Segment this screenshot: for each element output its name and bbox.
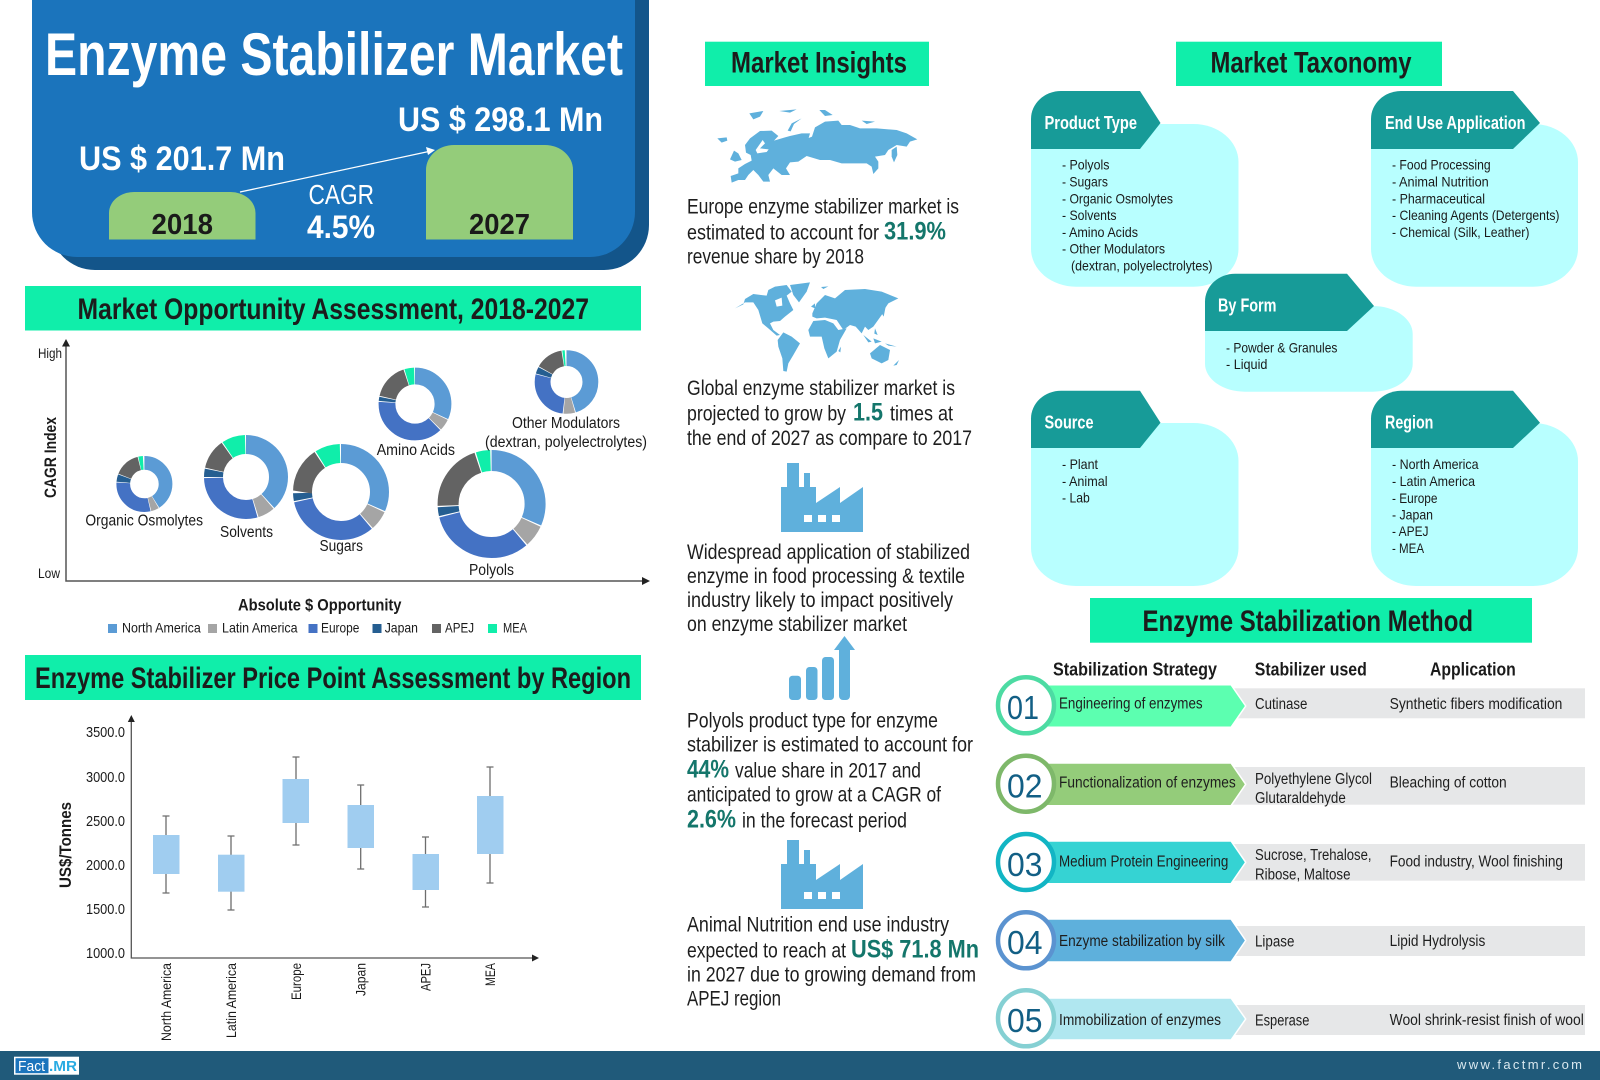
heading: price point — [25, 655, 641, 700]
text: europe insight: Europe enzyme stabilizer market is — [687, 196, 959, 218]
y axis title: US$/Tonnes — [57, 802, 75, 888]
growth arrow — [240, 147, 435, 192]
logo: Fact — [18, 1058, 46, 1075]
legend: Latin America — [222, 620, 298, 636]
bar 2027 — [426, 145, 573, 241]
card: region — [1371, 391, 1578, 586]
card: end use application: End Use Application — [1385, 113, 1526, 133]
x tick labels: MEA — [482, 963, 498, 986]
box: europe — [282, 757, 309, 845]
row 03: Ribose, Maltose — [1255, 866, 1350, 883]
row 02: Bleaching of cotton — [1390, 775, 1507, 792]
card: region: - MEA — [1392, 540, 1425, 556]
card: end use application: - Cleaning Agents (Detergents) — [1392, 207, 1560, 223]
icon: factory — [781, 463, 863, 532]
legend — [108, 620, 528, 636]
row 02: Functionalization of enzymes — [1059, 775, 1236, 792]
row 02: Glutaraldehyde — [1255, 790, 1346, 807]
heading: market opportunity: Market Opportunity Assessment, 2018-2027 — [78, 293, 589, 326]
x tick labels: Latin America — [223, 963, 239, 1038]
card: product type: - Polyols — [1062, 157, 1109, 173]
footer — [0, 1051, 1600, 1080]
row 04: 04 — [1007, 924, 1042, 961]
card: product type: - Organic Osmolytes — [1062, 190, 1173, 206]
donut labels: (dextran, polyelectrolytes) — [485, 434, 647, 451]
axes — [128, 715, 539, 962]
hero panel: market size — [32, 0, 649, 270]
2027 value: US $ 298.1 Mn — [398, 101, 603, 139]
CAGR: 4.5% — [307, 209, 375, 245]
icon: world map — [735, 282, 899, 372]
card: source: - Plant — [1062, 456, 1098, 472]
text: polyols insight: 2.6% — [687, 806, 736, 834]
CAGR: CAGR — [308, 179, 374, 210]
axis labels: Low — [38, 565, 61, 581]
row 03: 03 — [1007, 846, 1042, 883]
text: animal nutrition insight — [687, 914, 979, 1011]
row 03: Sucrose, Trehalose, — [1255, 847, 1372, 864]
text: animal nutrition insight: Animal Nutrition end use industry — [687, 914, 949, 937]
x tick labels: APEJ — [418, 963, 434, 991]
axis labels: Absolute $ Opportunity — [238, 596, 402, 614]
heading: market taxonomy: Market Taxonomy — [1210, 46, 1412, 80]
donut: sugars — [302, 454, 380, 530]
row 05: Esperase — [1255, 1013, 1309, 1030]
legend: Europe — [321, 620, 360, 636]
chart: price box plot — [57, 715, 539, 1041]
x tick labels: Japan — [352, 963, 368, 996]
axes — [62, 339, 650, 585]
column headers — [1053, 660, 1516, 680]
card: by form: - Powder & Granules — [1226, 339, 1337, 355]
donut labels: Polyols — [469, 562, 514, 579]
icon: growth bars — [789, 636, 855, 700]
card: source: Source — [1044, 412, 1094, 432]
card: product type: - Other Modulators — [1062, 241, 1165, 257]
card: end use application — [1371, 91, 1578, 287]
text: global insight: projected to grow by — [687, 403, 846, 426]
text: application insight: industry likely to impact positively — [687, 589, 953, 612]
axis labels: CAGR Index — [41, 417, 60, 498]
y tick labels: 3500.0 — [86, 725, 125, 741]
y tick labels: 3000.0 — [86, 770, 125, 786]
bar 2018 — [109, 192, 256, 241]
card: end use application: - Pharmaceutical — [1392, 190, 1485, 206]
donut labels: Sugars — [320, 538, 363, 555]
y tick labels: 1500.0 — [86, 902, 125, 918]
bar 2018: 2018 — [152, 209, 213, 241]
box: mea — [477, 767, 504, 883]
heading: market insights: Market Insights — [731, 46, 907, 80]
row 04 — [998, 912, 1585, 968]
heading: market taxonomy — [1176, 42, 1442, 86]
card: product type: - Amino Acids — [1062, 224, 1138, 240]
text: polyols insight: anticipated to grow at a CAGR of — [687, 784, 941, 807]
box: japan — [348, 785, 374, 869]
text: polyols insight: value share in 2017 and — [735, 760, 921, 782]
text: application insight — [687, 541, 970, 636]
row 02: 02 — [1007, 768, 1042, 805]
card: end use application: - Animal Nutrition — [1392, 174, 1489, 190]
card: by form — [1205, 274, 1413, 392]
text: animal nutrition insight: expected to reach at — [687, 940, 846, 962]
card: region: - Latin America — [1392, 473, 1475, 489]
heading: stabilization method — [1090, 598, 1532, 643]
axis labels — [38, 345, 402, 614]
box: north america — [153, 816, 180, 893]
text: polyols insight: stabilizer is estimated to account for — [687, 734, 973, 757]
card: region: - Europe — [1392, 490, 1438, 506]
donut labels — [85, 415, 647, 579]
table: stabilization method — [998, 660, 1585, 1046]
text: global insight: the end of 2027 as compare to 2017 — [687, 427, 972, 450]
text: animal nutrition insight: in 2027 due to growing demand from — [687, 964, 976, 987]
text: global insight: times at — [890, 403, 953, 426]
card: source — [1031, 391, 1238, 586]
card: source: - Lab — [1062, 490, 1090, 506]
text: animal nutrition insight: APEJ region — [687, 988, 781, 1011]
box: apej — [412, 837, 439, 907]
card: end use application: - Food Processing — [1392, 157, 1491, 173]
row 04: Lipase — [1255, 934, 1294, 951]
legend: APEJ — [445, 620, 474, 636]
row 03: Medium Protein Engineering — [1059, 854, 1228, 871]
card: end use application: - Chemical (Silk, Leather) — [1392, 224, 1529, 240]
row 05: 05 — [1007, 1002, 1042, 1039]
text: polyols insight: 44% — [687, 756, 729, 784]
row 01: Engineering of enzymes — [1059, 696, 1203, 712]
icon: europe map — [717, 109, 917, 183]
text: application insight: enzyme in food processing & textile — [687, 565, 965, 588]
row 03 — [998, 834, 1585, 890]
text: polyols insight: in the forecast period — [742, 810, 907, 832]
legend: North America — [122, 620, 201, 636]
row 04: Enzyme stabilization by silk — [1059, 933, 1225, 950]
website: www.factmr.com — [1456, 1057, 1582, 1072]
card: source: - Animal — [1062, 473, 1108, 489]
bar 2027: 2027 — [469, 209, 530, 241]
logo: .MR — [49, 1058, 77, 1075]
row 03: Food industry, Wool finishing — [1390, 854, 1563, 871]
column headers: Stabilization Strategy — [1053, 660, 1217, 680]
2018 value: US $ 201.7 Mn — [79, 140, 285, 178]
text: global insight — [687, 377, 972, 450]
heading: stabilization method: Enzyme Stabilization Method — [1142, 605, 1473, 638]
row 05: Immobilization of enzymes — [1059, 1012, 1221, 1029]
donut labels: Amino Acids — [377, 442, 455, 459]
column headers: Stabilizer used — [1255, 660, 1367, 680]
card: by form: By Form — [1218, 296, 1276, 316]
donut labels: Other Modulators — [512, 415, 620, 432]
axis labels: High — [38, 345, 62, 361]
donut: solvents — [214, 444, 278, 510]
row 02: Polyethylene Glycol — [1255, 771, 1372, 788]
text: polyols insight: Polyols product type for enzyme — [687, 710, 938, 733]
card: product type — [1031, 91, 1238, 287]
text: global insight: Global enzyme stabilizer market is — [687, 377, 955, 400]
card: product type: (dextran, polyelectrolytes) — [1071, 258, 1212, 274]
row 05: Wool shrink-resist finish of wool — [1390, 1012, 1584, 1029]
donut: organic osmolytes — [123, 463, 166, 505]
y tick labels — [86, 725, 125, 962]
title: Enzyme Stabilizer Market — [45, 21, 623, 88]
legend: MEA — [503, 620, 528, 636]
chart: opportunity donuts — [38, 339, 650, 636]
row 02 — [998, 756, 1585, 812]
card: product type: - Solvents — [1062, 207, 1116, 223]
row 01: 01 — [1007, 689, 1039, 726]
text: application insight: on enzyme stabilizer market — [687, 613, 907, 636]
heading: market insights — [705, 42, 929, 86]
card: product type: - Sugars — [1062, 174, 1108, 190]
heading: market opportunity — [25, 286, 641, 330]
text: animal nutrition insight: US$ 71.8 Mn — [851, 936, 979, 964]
card: region: - APEJ — [1392, 523, 1428, 539]
column headers: Application — [1430, 660, 1516, 680]
text: europe insight: 31.9% — [884, 218, 946, 246]
donut: other modulators — [543, 358, 590, 406]
x tick labels: North America — [158, 963, 174, 1041]
text: polyols insight — [687, 710, 973, 834]
text: global insight: 1.5 — [853, 399, 883, 427]
row 04: Lipid Hydrolysis — [1390, 933, 1486, 950]
logo — [14, 1057, 79, 1075]
row 01 — [998, 677, 1585, 733]
row 01: Cutinase — [1255, 696, 1307, 713]
donut: amino acids — [387, 376, 443, 432]
heading: price point: Enzyme Stabilizer Price Point Assessment by Region — [35, 662, 631, 695]
y tick labels: 2000.0 — [86, 858, 125, 874]
text: europe insight — [687, 196, 959, 268]
text: europe insight: estimated to account for — [687, 222, 879, 244]
card: region: - North America — [1392, 456, 1479, 472]
row 05 — [998, 990, 1585, 1046]
y tick labels: 1000.0 — [86, 946, 125, 962]
card: region: - Japan — [1392, 506, 1433, 522]
donut: polyols — [448, 460, 535, 548]
donut labels: Organic Osmolytes — [85, 513, 203, 530]
x tick labels — [158, 963, 498, 1041]
legend: Japan — [385, 620, 418, 636]
text: application insight: Widespread application of stabilized — [687, 541, 970, 564]
card: product type: Product Type — [1044, 113, 1137, 133]
CAGR — [307, 179, 375, 245]
icon: factory — [781, 840, 863, 909]
text: europe insight: revenue share by 2018 — [687, 246, 864, 268]
donut labels: Solvents — [220, 524, 273, 541]
row 01: Synthetic fibers modification — [1390, 696, 1562, 713]
x tick labels: Europe — [288, 963, 304, 1000]
card: region: Region — [1385, 412, 1433, 432]
y tick labels: 2500.0 — [86, 814, 125, 830]
box: latin america — [218, 836, 244, 910]
card: by form: - Liquid — [1226, 356, 1267, 372]
